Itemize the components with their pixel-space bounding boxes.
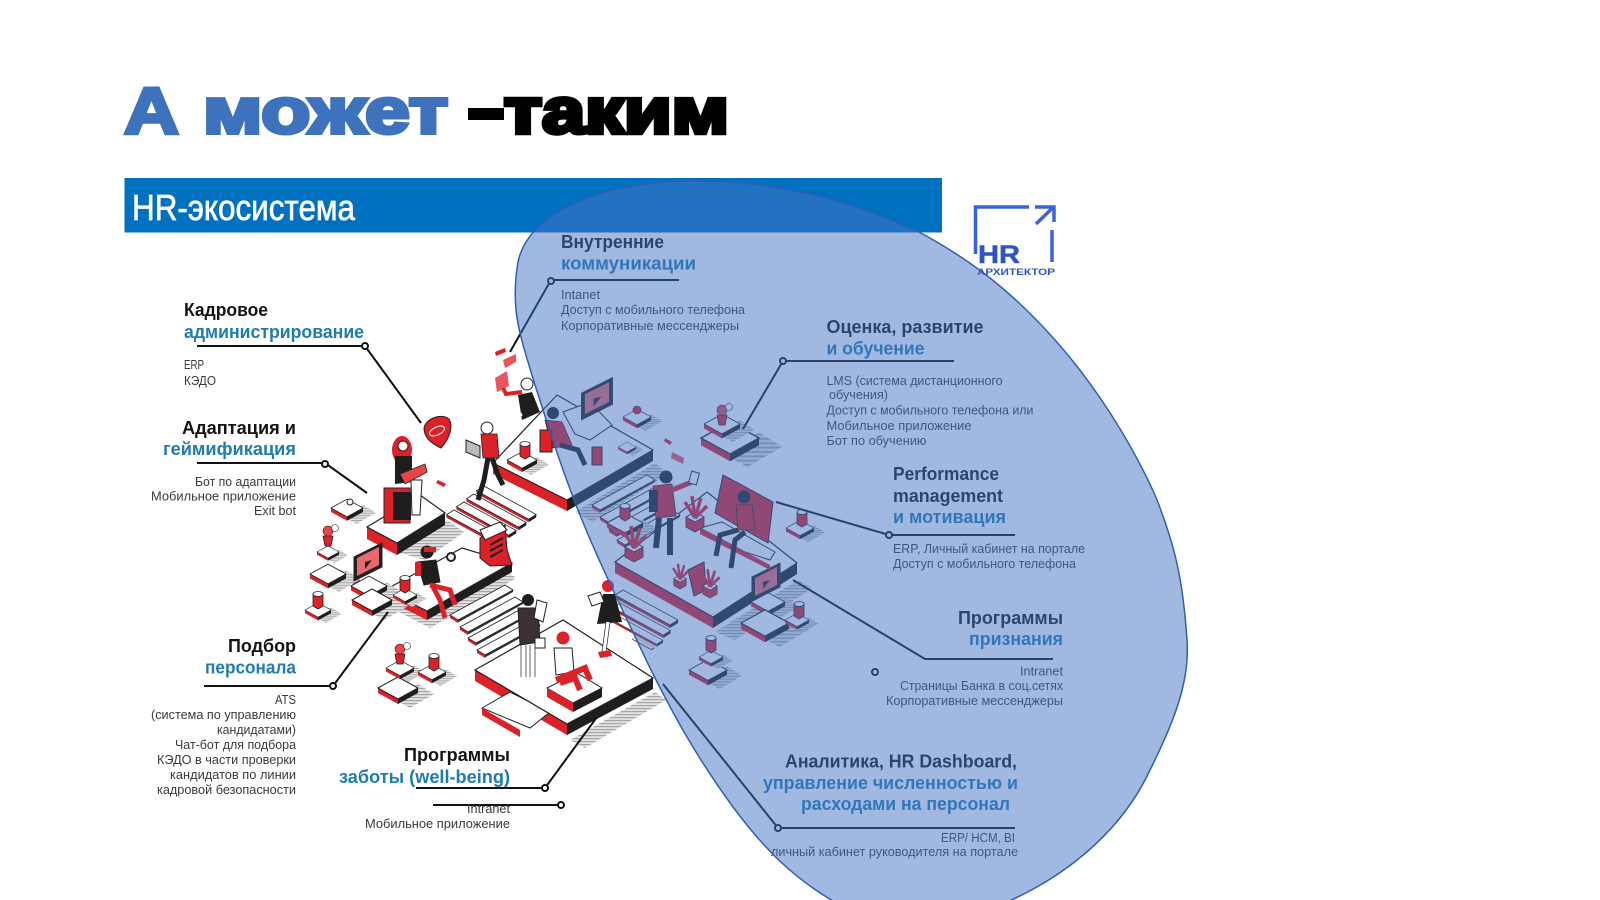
small pedestals and objects xyxy=(305,348,825,708)
banner: HR-экосистема xyxy=(124,178,942,232)
person: selfie man xyxy=(649,470,699,555)
callout: Аналитика, HR Dashboard: личный кабинет руководителя на портале xyxy=(771,844,1018,859)
person: man on red bench xyxy=(700,475,775,570)
callout: Оценка, развитие и обучение: Доступ с мобильного телефона или xyxy=(826,402,1034,418)
callout: Адаптация и геймификация xyxy=(151,418,367,518)
callout: Performance management и мотивация: Доступ с мобильного телефона xyxy=(893,556,1077,571)
callout: Программы признания: признания xyxy=(969,629,1063,649)
platform: office top xyxy=(493,395,668,522)
platform: woman with laptop xyxy=(367,495,464,560)
callout: Программы признания: Intranet xyxy=(1020,664,1063,678)
callout: Аналитика, HR Dashboard: расходами на персонал xyxy=(801,794,1010,814)
callout: Подбор персонала: Чат-бот для подбора xyxy=(175,737,297,752)
callout: Подбор персонала xyxy=(151,612,388,797)
callout: Подбор персонала: персонала xyxy=(205,658,297,678)
callout: Программы заботы: Программы xyxy=(404,745,510,765)
callout: Программы заботы: Мобильное приложение xyxy=(365,816,510,831)
title: blue word: может xyxy=(203,75,448,147)
person: seated woman top xyxy=(503,378,540,428)
callout: Программы заботы: Intranet xyxy=(467,801,510,816)
callout: Подбор персонала: КЭДО в части проверки xyxy=(157,752,296,767)
person: man at desk xyxy=(540,378,612,465)
translucent blue highlight blob xyxy=(515,181,1187,900)
callout: Оценка, развитие и обучение: и обучение xyxy=(826,338,924,358)
callout: Подбор персонала: кандидатов по линии xyxy=(170,767,296,782)
callout: Оценка, развитие и обучение: LMS (система дистанционного xyxy=(826,373,1002,388)
callout: Аналитика, HR Dashboard: управление численностью и xyxy=(763,773,1018,793)
callout: Performance management и мотивация: ERP, Личный кабинет на портале xyxy=(893,541,1085,556)
callout: Кадровое администрирование: КЭДО xyxy=(184,373,216,388)
callout: Аналитика, HR Dashboard xyxy=(663,684,1018,859)
person: woman with laptop xyxy=(384,436,427,523)
callout: Адаптация и геймификация: Адаптация и xyxy=(182,418,296,438)
callout: Подбор персонала: (система по управлению xyxy=(151,707,296,722)
title xyxy=(124,74,729,148)
callout: Программы признания: Страницы Банка в соц.сетях xyxy=(900,678,1063,693)
callout: Performance management и мотивация: и мотивация xyxy=(893,507,1006,527)
title: black word: таким xyxy=(504,75,729,147)
callout: Оценка, развитие и обучение xyxy=(743,317,1034,448)
stairs xyxy=(446,475,680,658)
callout: Кадровое администрирование: ERP xyxy=(184,357,204,372)
logo: HR архитектор: АРХИТЕКТОР xyxy=(977,267,1056,278)
callout: Оценка, развитие и обучение: Оценка, развитие xyxy=(826,317,984,337)
platform: VR man xyxy=(340,548,516,628)
platform: central xyxy=(615,492,812,640)
callout: Аналитика, HR Dashboard: Аналитика, HR Dashboard, xyxy=(785,752,1017,772)
callout: Кадровое администрирование: Кадровое xyxy=(184,300,268,320)
callout: Кадровое администрирование xyxy=(184,300,421,423)
callout: Оценка, развитие и обучение: обучения) xyxy=(829,387,888,402)
callout: Performance management и мотивация: Performance xyxy=(893,464,999,484)
callout: Внутренние коммуникации: коммуникации xyxy=(561,254,696,274)
callout: Внутренние коммуникации: Внутренние xyxy=(561,232,664,252)
callout: Кадровое администрирование: администрирование xyxy=(184,322,364,342)
callout: Программы признания: Программы xyxy=(958,608,1063,628)
logo: HR архитектор: HR xyxy=(978,241,1020,269)
callout: Подбор персонала: кандидатами) xyxy=(217,722,296,737)
person: walking on stairs xyxy=(466,422,503,500)
callout: Программы признания xyxy=(793,580,1063,708)
callout: Подбор персонала: Подбор xyxy=(228,636,296,656)
title: blue capital: А xyxy=(124,74,179,148)
isometric illustration xyxy=(305,348,825,748)
plants xyxy=(624,496,720,598)
callout: Оценка, развитие и обучение: Бот по обучению xyxy=(826,433,927,448)
platform: lower xyxy=(475,620,666,748)
callout: Адаптация и геймификация: Exit bot xyxy=(254,503,296,518)
callout: Performance management и мотивация xyxy=(776,464,1085,571)
callout: Программы заботы: заботы (well-being) xyxy=(339,767,510,787)
callout: Подбор персонала: кадровой безопасности xyxy=(157,782,296,797)
callout: Внутренние коммуникации: Intanet xyxy=(561,287,600,302)
person: seated with red cap xyxy=(547,632,602,712)
logo: HR архитектор xyxy=(976,207,1056,278)
equipment: red cabinet xyxy=(480,522,512,566)
callout: Аналитика, HR Dashboard: ERP/ HCM, BI xyxy=(941,830,1015,845)
callout: Адаптация и геймификация: геймификация xyxy=(163,439,296,459)
person: VR man xyxy=(415,546,455,618)
callout: Адаптация и геймификация: Бот по адаптации xyxy=(195,474,296,489)
callout: Внутренние коммуникации: Корпоративные мессенджеры xyxy=(561,318,739,333)
banner: HR-экосистема: HR-экосистема xyxy=(132,187,356,228)
icon: red heart pin xyxy=(424,416,451,448)
person: man with tablet xyxy=(518,594,547,677)
callout: Адаптация и геймификация: Мобильное приложение xyxy=(151,488,296,504)
callout: Внутренние коммуникации: Доступ с мобильного телефона xyxy=(561,302,746,317)
callout: Оценка, развитие и обучение: Мобильное приложение xyxy=(826,418,972,433)
title: black dash xyxy=(468,108,504,120)
callout: Performance management и мотивация: management xyxy=(893,486,1003,506)
callout: Подбор персонала: ATS xyxy=(275,692,296,707)
person: woman in black skirt xyxy=(588,580,622,658)
callout: Программы признания: Корпоративные мессенджеры xyxy=(886,693,1063,708)
callout: Внутренние коммуникации xyxy=(510,232,746,352)
callout: Программы заботы xyxy=(339,717,597,831)
